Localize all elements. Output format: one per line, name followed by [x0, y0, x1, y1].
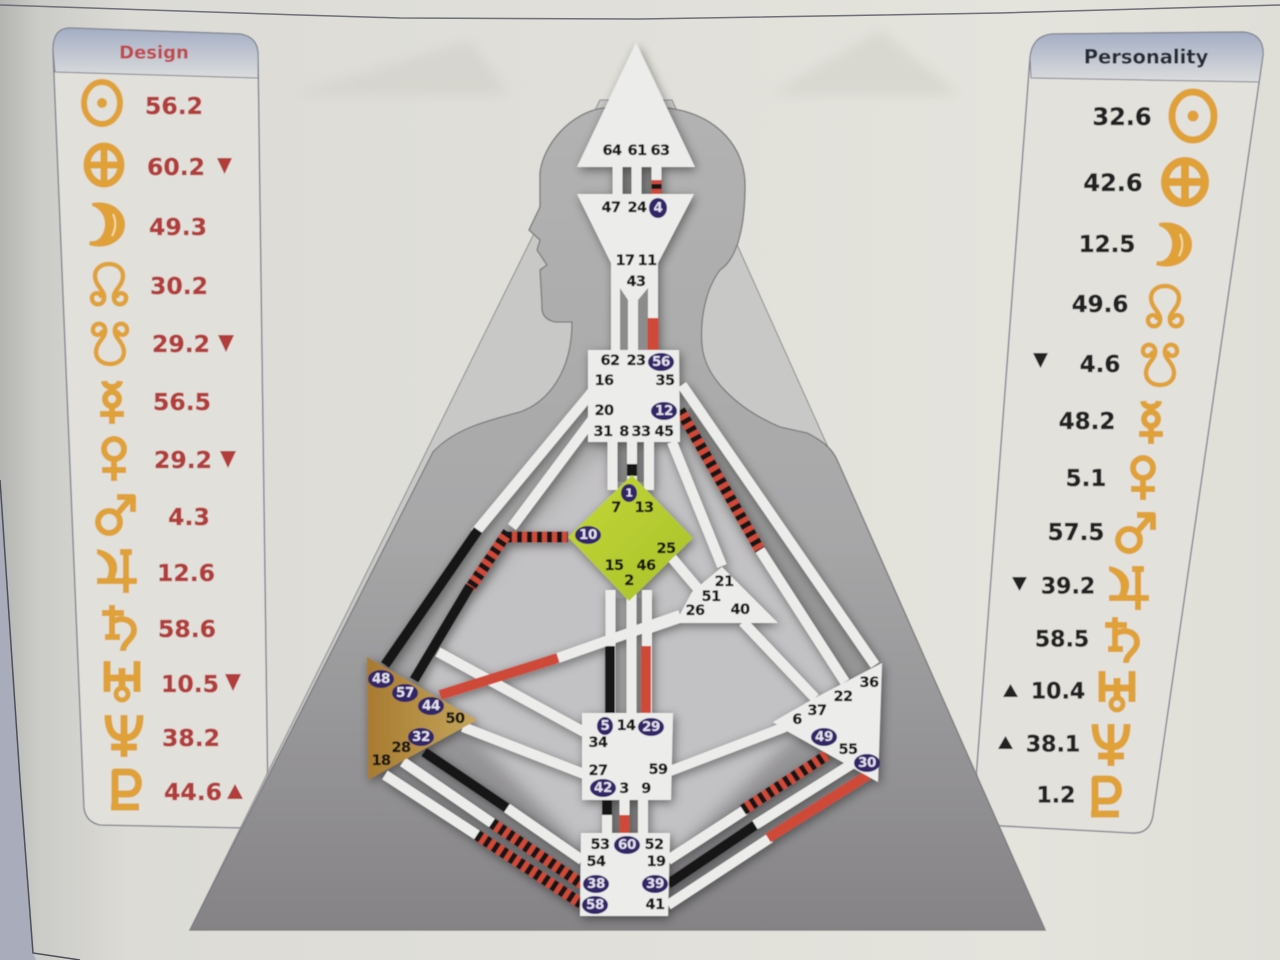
gates: G: 10 — [579, 527, 597, 543]
row: venus 5.1: 5.1 — [1066, 466, 1106, 492]
row: pluto 44.6 — [111, 772, 243, 807]
row: earth 60.2 — [87, 146, 232, 184]
gates: throat: 33 — [632, 424, 650, 440]
panel: Design — [53, 28, 268, 828]
row: south node 29.2: 29.2 — [152, 330, 210, 358]
gates: solar plexus: 37 — [808, 703, 826, 719]
channel: throat to spleen inner with G link (10-20) — [414, 420, 592, 680]
row: mercury 48.2 — [1059, 401, 1163, 444]
channels: sacral to root — [607, 798, 643, 835]
gates: sacral: 42 — [594, 780, 612, 796]
panel frame: Personality — [974, 32, 1263, 833]
gates: sacral: 3 — [619, 781, 629, 797]
center: G diamond — [568, 475, 693, 601]
row: moon 12.5: 12.5 — [1079, 232, 1135, 258]
row: moon 49.3: 49.3 — [149, 213, 207, 241]
row: sun 32.6 — [1092, 92, 1214, 140]
row: jupiter 39.2 — [1012, 566, 1149, 610]
gates: sacral — [589, 717, 668, 797]
row: saturn 58.5 — [1035, 617, 1137, 663]
gates: root: 53 — [591, 837, 609, 853]
row: jupiter 12.6 — [97, 549, 215, 593]
gates: throat: 12 — [655, 403, 673, 419]
channels: G to sacral — [610, 590, 647, 714]
gates: G: 13 — [635, 500, 653, 516]
gates: solar plexus: 6 — [792, 712, 802, 728]
gates: root: 19 — [647, 854, 666, 870]
gates: throat — [594, 353, 677, 440]
center: sacral — [582, 713, 673, 800]
channel: root to solar plexus (19-49) — [668, 755, 827, 860]
gates: G — [575, 484, 676, 589]
row: uranus 10.5 — [107, 661, 241, 700]
gates: solar plexus — [792, 675, 880, 772]
gates: root: 38 — [587, 876, 605, 892]
gates: solar plexus: 55 — [839, 742, 858, 758]
row: mars 57.5 — [1048, 515, 1153, 551]
gates: spleen: 50 — [446, 711, 465, 727]
row: earth 42.6 — [1083, 161, 1205, 203]
gates: ego: 40 — [731, 602, 750, 618]
row: neptune 38.2 — [108, 715, 220, 757]
row: south node 29.2 — [93, 324, 234, 364]
panel: Personality — [974, 32, 1263, 833]
gates: head — [603, 143, 669, 159]
gates: ego: 26 — [686, 603, 705, 619]
gates: sacral: 27 — [589, 763, 607, 779]
row: jupiter 39.2: 39.2 — [1041, 574, 1095, 600]
row: south node 4.6 — [1033, 345, 1177, 385]
gates: G: 7 — [611, 500, 621, 516]
gates: sacral: 9 — [641, 781, 651, 797]
gates: throat: 62 — [601, 353, 619, 369]
heading: Personality: Personality — [1084, 46, 1209, 68]
channel: ego to solar plexus (40-37) — [743, 622, 815, 698]
gates: sacral: 29 — [642, 719, 660, 735]
gates: spleen: 48 — [372, 671, 390, 687]
center: solar plexus — [773, 663, 882, 782]
gates: root: 58 — [586, 897, 604, 913]
channel: throat to spleen outer (20-57) — [385, 392, 592, 665]
gates: ajna: 11 — [638, 253, 657, 269]
row: north node 30.2 — [92, 264, 208, 304]
gates: ajna: 47 — [602, 200, 620, 216]
row: pluto 44.6: 44.6 — [164, 778, 222, 806]
channel: sacral to solar plexus (59-6) — [670, 727, 785, 771]
gates: G: 15 — [605, 558, 624, 574]
gates: root: 39 — [646, 876, 664, 892]
row: neptune 38.1 — [998, 724, 1127, 766]
row: saturn 58.5: 58.5 — [1035, 628, 1089, 652]
row: north node 30.2: 30.2 — [150, 272, 208, 300]
channel: G to ego (25-51) — [672, 558, 699, 590]
gates: spleen — [368, 670, 465, 769]
row: venus 29.2: 29.2 — [154, 446, 212, 474]
gates: throat: 31 — [594, 424, 613, 440]
gates: sacral: 5 — [600, 718, 610, 734]
row: uranus 10.4 — [1003, 671, 1132, 710]
row: north node 49.6: 49.6 — [1072, 292, 1128, 318]
gates: spleen: 57 — [396, 685, 414, 701]
channels — [367, 43, 882, 916]
gates: throat: 45 — [655, 424, 674, 440]
gates: solar plexus: 49 — [815, 729, 833, 745]
gates: throat: 56 — [652, 354, 670, 370]
background triangle — [190, 100, 1045, 930]
row: venus 5.1 — [1066, 458, 1155, 500]
gates: sacral: 14 — [617, 718, 636, 734]
row: mars 4.3: 4.3 — [168, 503, 210, 531]
row: moon 49.3 — [89, 202, 207, 247]
row: sun 56.2 — [84, 82, 203, 124]
gates: throat: 35 — [656, 373, 675, 389]
heading: Design: Design — [119, 42, 189, 64]
gates: ego: 21 — [715, 574, 734, 590]
row: moon 12.5 — [1079, 222, 1192, 267]
gates: throat: 8 — [619, 424, 629, 440]
row: mercury 56.5: 56.5 — [153, 388, 211, 416]
gates: G: 2 — [624, 573, 634, 589]
gates: root: 41 — [646, 897, 665, 913]
gates: spleen: 44 — [422, 698, 440, 714]
row: earth 60.2: 60.2 — [147, 153, 205, 181]
row: earth 42.6: 42.6 — [1083, 169, 1143, 197]
gates: G: 46 — [637, 558, 656, 574]
gates: head: 63 — [651, 143, 669, 159]
gates: G: 1 — [625, 486, 633, 500]
center: ego — [648, 567, 778, 634]
gates: root: 52 — [645, 837, 663, 853]
channels: head to ajna — [618, 165, 656, 196]
gates: ajna: 17 — [616, 253, 634, 269]
gates: ajna: 43 — [627, 274, 645, 290]
panel: bodygraph — [190, 43, 1045, 930]
gates: root — [582, 836, 668, 914]
lighter interior of the graph — [410, 440, 850, 860]
row: jupiter 12.6: 12.6 — [157, 559, 215, 587]
gates: head: 64 — [603, 143, 622, 159]
channel: spleen to root (28-38) — [403, 762, 582, 884]
row: neptune 38.1: 38.1 — [1026, 732, 1080, 758]
channel: root to solar plexus (41-30) — [668, 775, 868, 905]
gates: throat: 20 — [595, 403, 614, 419]
row: venus 29.2 — [102, 439, 236, 481]
gates: ajna: 24 — [628, 200, 647, 216]
center: root — [580, 833, 670, 916]
panel header: Personality — [1030, 32, 1263, 82]
gates: spleen: 18 — [372, 753, 391, 769]
row: north node 49.6 — [1072, 286, 1182, 326]
gates: head: 61 — [628, 143, 647, 159]
gates: spleen: 28 — [392, 740, 411, 756]
gates: G: 25 — [657, 541, 676, 557]
channel: throat to solar plexus (12-22) — [680, 410, 845, 682]
dark gaps between channels — [602, 167, 873, 834]
center: ajna with neck stem — [577, 194, 694, 352]
row: mars 57.5: 57.5 — [1048, 520, 1104, 546]
row: south node 4.6: 4.6 — [1080, 352, 1120, 378]
row: mars 4.3 — [98, 497, 210, 533]
gates: throat: 23 — [627, 353, 645, 369]
gates: root: 54 — [587, 854, 606, 870]
channels: throat to G — [612, 440, 649, 490]
center: spleen — [367, 657, 477, 780]
channel: throat to ego (21-45) — [672, 442, 722, 566]
gates: ajna: 4 — [654, 200, 662, 216]
row: mercury 48.2: 48.2 — [1059, 409, 1115, 435]
gates: throat: 16 — [595, 373, 614, 389]
human silhouette — [190, 108, 1045, 930]
center: throat — [588, 350, 680, 442]
row: pluto 1.2: 1.2 — [1037, 784, 1075, 808]
row: uranus 10.5: 10.5 — [161, 670, 219, 698]
row: pluto 1.2 — [1037, 779, 1119, 814]
gates: ego — [686, 574, 750, 619]
gates: sacral: 59 — [649, 762, 668, 778]
gates: solar plexus: 22 — [834, 689, 852, 705]
channel: throat to solar plexus (35-36) — [682, 385, 875, 665]
channel: spleen to sacral (50-27) — [463, 727, 584, 774]
channel: spleen to root (18-58) — [385, 775, 582, 904]
channel: spleen to sacral (57-34) — [438, 652, 584, 732]
row: saturn 58.6 — [102, 605, 216, 651]
gates: spleen: 32 — [412, 729, 430, 745]
gates: sacral: 34 — [589, 735, 608, 751]
gates: root: 60 — [618, 837, 636, 853]
row: saturn 58.6: 58.6 — [158, 615, 216, 643]
gates: ego: 51 — [702, 589, 721, 605]
panel header: Design — [53, 28, 258, 78]
center: head — [577, 43, 695, 167]
gates: solar plexus: 36 — [860, 675, 879, 691]
row: neptune 38.2: 38.2 — [162, 724, 220, 752]
row: sun 56.2: 56.2 — [145, 92, 203, 120]
row: sun 32.6: 32.6 — [1092, 103, 1152, 131]
row: mercury 56.5 — [100, 381, 211, 424]
panel frame: Design — [53, 28, 268, 828]
row: uranus 10.4: 10.4 — [1031, 680, 1085, 704]
gates: solar plexus: 30 — [858, 755, 876, 771]
gates: ajna — [602, 198, 667, 290]
channel: spleen to root (32-54) — [424, 752, 582, 860]
channel: spleen to ego (44-26) — [440, 615, 680, 695]
gate numbers — [368, 143, 880, 914]
channel: root to solar plexus (39-55) — [668, 762, 855, 884]
